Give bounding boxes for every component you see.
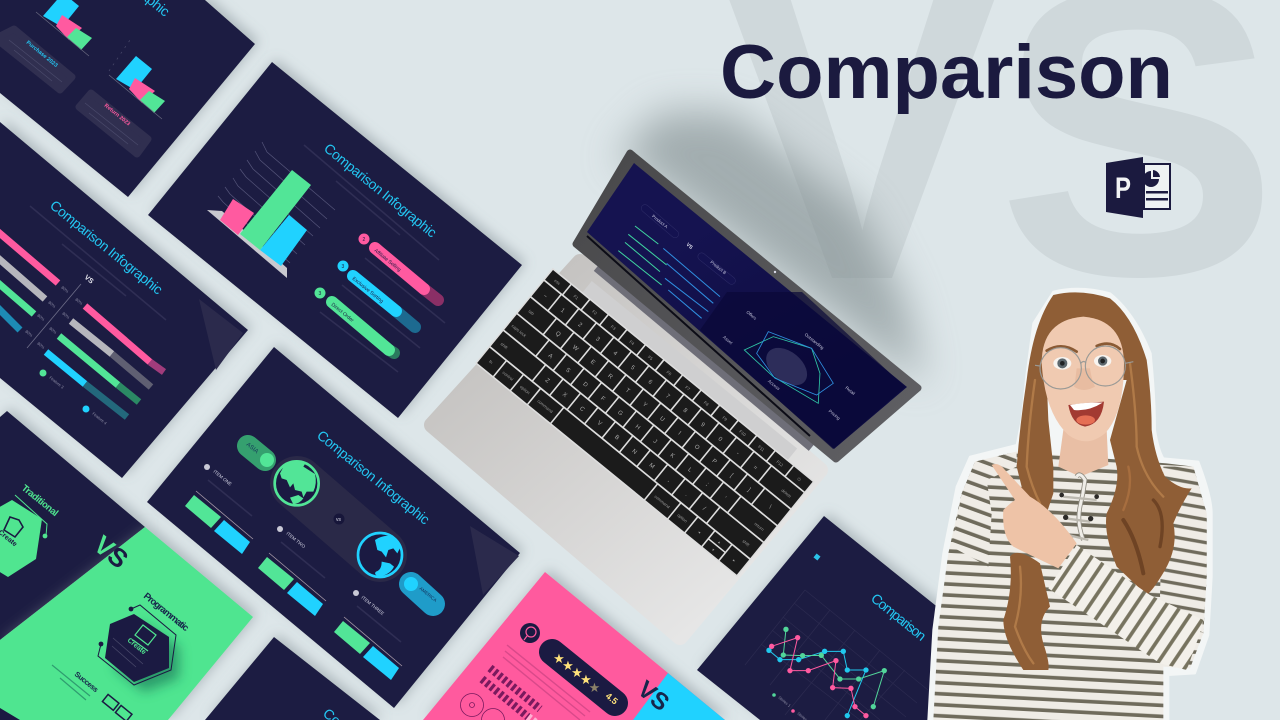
function row: F9 <box>721 415 729 422</box>
legend <box>772 693 812 720</box>
camera <box>774 271 776 273</box>
vs badge: vs <box>336 517 342 523</box>
function row: F8 <box>703 400 710 407</box>
hair highlights <box>1015 363 1163 663</box>
icon: magnifier badge <box>520 623 540 643</box>
legend: Feature 4 <box>91 411 108 426</box>
legend <box>40 370 108 426</box>
hinge <box>597 267 812 447</box>
percent labels: 80% <box>74 297 84 306</box>
rating pill: ★ <box>571 665 583 680</box>
center divider with VS: VS <box>83 274 95 286</box>
home row: H <box>634 424 641 431</box>
slide: bottom partial <box>205 637 389 720</box>
traditional hexagon <box>0 495 47 577</box>
slide title: Comparison Infographic <box>321 140 440 240</box>
percent labels: 80% <box>36 313 46 322</box>
function row: F5 <box>647 354 654 362</box>
chart: category 1 <box>36 0 92 56</box>
QWERTY row: tab <box>528 309 536 317</box>
bottom letter row: , <box>666 478 672 484</box>
item 1 pill <box>358 234 445 323</box>
QWERTY row: [ <box>729 473 734 479</box>
rating pill: ★ <box>589 680 600 695</box>
title: Comparison <box>720 30 1173 115</box>
slide: top-left bar charts <box>0 0 255 197</box>
space row: ◂ <box>697 529 702 535</box>
bottom letter row: shift <box>500 341 509 351</box>
slide title: Comparison Infographic <box>314 427 433 527</box>
circle icons <box>460 694 504 720</box>
function row: F2 <box>591 309 599 316</box>
function row: F3 <box>610 324 617 331</box>
rating pill <box>552 651 620 706</box>
number row: 6 <box>647 379 653 386</box>
radar labels: Retail <box>844 385 856 396</box>
eyebrows <box>1047 344 1120 352</box>
chart: category 2 <box>109 40 165 119</box>
card: return: Return 2023 <box>103 103 131 127</box>
item three: ITEM THREE <box>360 595 385 616</box>
space row: command <box>536 398 554 414</box>
center divider with VS <box>27 274 95 348</box>
bottom letter row: M <box>648 463 655 470</box>
heading: programmatic: Programmatic <box>141 591 191 634</box>
screen <box>587 163 907 449</box>
number row: 8 <box>682 408 689 415</box>
laptop lid <box>576 153 918 459</box>
icon: blue globe <box>358 533 402 577</box>
pointing hand <box>992 464 1077 568</box>
QWERTY row <box>518 298 790 525</box>
home row: G <box>616 410 624 418</box>
function row <box>545 270 813 491</box>
bottom letter row: V <box>596 420 603 427</box>
heading: success: Success <box>73 670 100 694</box>
card: purchase <box>0 29 72 90</box>
percent labels <box>24 285 84 350</box>
cyan accent square <box>813 553 821 561</box>
function row: F1 <box>573 294 580 301</box>
home row <box>504 314 776 541</box>
torso sweater <box>933 452 1207 720</box>
face <box>1042 317 1124 441</box>
bottom letter row: Z <box>544 378 550 385</box>
neckline lace <box>1059 475 1099 540</box>
space row: ▸ <box>732 558 737 563</box>
slide title: Comparison Infographic <box>47 197 166 297</box>
slide title: Comparison <box>868 590 929 644</box>
icon: green globe <box>275 461 319 505</box>
connector band <box>297 483 380 555</box>
icon: PowerPoint: P <box>1115 170 1131 205</box>
slide: rating pink and cyan <box>423 572 725 720</box>
radar labels: Offers <box>745 310 758 321</box>
america pill <box>404 577 439 604</box>
home row: L <box>686 467 693 474</box>
slide: traditional vs programmatic <box>0 411 253 720</box>
function row: F12 <box>775 459 785 468</box>
chart: grid <box>745 590 928 720</box>
number row: = <box>752 465 759 472</box>
rating pill: ★ <box>580 672 592 687</box>
home row: J <box>652 439 658 445</box>
item one <box>185 464 253 554</box>
screen content in zoom coordinates: VS <box>685 242 694 251</box>
function row: F4 <box>628 339 636 347</box>
number row: 2 <box>577 322 583 329</box>
success text lines <box>52 665 90 700</box>
QWERTY row: Y <box>641 402 648 409</box>
decorative triangle <box>199 299 243 370</box>
asia pill <box>245 442 274 467</box>
laptop base <box>432 262 820 637</box>
text lines <box>503 645 590 720</box>
number row: 4 <box>612 351 618 358</box>
space row: option <box>519 384 532 396</box>
percent labels: 80% <box>24 329 34 338</box>
comparison bars <box>618 226 720 318</box>
card: return <box>79 93 148 154</box>
item 3 pill <box>314 288 398 372</box>
QWERTY row: Q <box>554 331 562 338</box>
screen content in zoom coordinates: Product B <box>709 260 727 275</box>
home row: F <box>599 396 606 403</box>
radar chart <box>744 332 833 403</box>
number row: 0 <box>717 436 724 443</box>
screen content in zoom coordinates: Product A <box>651 214 669 229</box>
QWERTY row: W <box>571 345 579 353</box>
percent labels: 80% <box>47 300 57 309</box>
number row: 3 <box>594 336 601 343</box>
subtitle lines <box>30 206 166 320</box>
QWERTY row: T <box>624 388 631 395</box>
percent labels: 80% <box>36 341 46 350</box>
radar labels: Outstanding <box>804 332 825 351</box>
space row: control <box>502 370 514 382</box>
laptop <box>432 153 918 637</box>
eyes <box>1053 355 1111 370</box>
item 1 pill: Affiliate Selling <box>373 248 402 273</box>
QWERTY row: I <box>677 431 682 437</box>
item one: ITEM ONE <box>212 469 233 487</box>
slide: 3D bar chart <box>148 62 522 418</box>
bottom letter row: C <box>578 406 586 414</box>
home row: return <box>753 521 766 532</box>
QWERTY row: \ <box>767 505 773 510</box>
QWERTY row: P <box>710 458 717 465</box>
screen content in zoom coordinates <box>618 208 856 421</box>
home row: K <box>669 453 676 460</box>
percent labels: 80% <box>48 326 58 335</box>
radar labels: Pricing <box>828 409 842 421</box>
percent labels: 80% <box>61 311 71 320</box>
subtitle lines <box>304 145 439 260</box>
card: purchase: Purchase 2023 <box>25 40 58 69</box>
left bars <box>0 225 58 330</box>
rating dashes <box>482 668 540 720</box>
legend: Feature 3 <box>48 375 65 390</box>
radar labels: Access <box>767 379 781 391</box>
item two: ITEM TWO <box>285 531 307 549</box>
america pill: AMERICA <box>418 586 439 604</box>
QWERTY row: ] <box>746 487 751 493</box>
number row: 5 <box>629 365 636 372</box>
forearm <box>1048 545 1203 670</box>
space row: fn <box>488 359 494 365</box>
glasses <box>1035 346 1133 389</box>
item 1 pill: 2 <box>362 237 366 243</box>
product pills <box>645 208 732 281</box>
rating pill: 4.5 <box>604 691 620 706</box>
speaker grill <box>582 281 797 460</box>
bottom letter row <box>491 331 763 558</box>
slide: globes comparison <box>147 347 520 708</box>
decorative triangle <box>470 526 519 595</box>
chart: 3D bars <box>207 142 335 278</box>
vs badge <box>334 514 344 524</box>
item 3 pill: Direct Order <box>330 302 355 324</box>
heading: traditional: Traditional <box>19 483 60 519</box>
sticker outline <box>928 289 1212 720</box>
radar labels: Asset <box>722 335 734 346</box>
item 2 pill <box>338 260 420 348</box>
keyboard <box>475 257 824 577</box>
radar labels <box>722 310 856 421</box>
chart: multi-series lines <box>766 627 887 718</box>
home row: caps lock <box>511 323 528 339</box>
item three <box>334 590 402 680</box>
percent labels: 80% <box>60 285 70 294</box>
function row: F11 <box>757 444 766 453</box>
number row: 9 <box>699 422 706 429</box>
number row: delete <box>780 488 793 499</box>
number row: ~ <box>541 293 548 301</box>
item 3 pill: 3 <box>318 291 322 297</box>
function row: F6 <box>666 370 673 377</box>
item two <box>258 526 326 616</box>
home row: A <box>547 353 554 360</box>
icon: PowerPoint <box>1106 157 1170 218</box>
right bars <box>46 306 164 417</box>
neck <box>1058 430 1108 477</box>
hair back <box>1017 292 1192 595</box>
bottom letter row: / <box>701 506 707 512</box>
QWERTY row: E <box>589 359 596 366</box>
space row <box>477 348 749 575</box>
laptop cast shadow <box>610 112 925 385</box>
home row: S <box>564 367 571 374</box>
function row: F10 <box>738 429 748 438</box>
programmatic hexagon: Create <box>126 637 147 656</box>
number row: 7 <box>664 393 671 401</box>
asia pill: ASIA <box>245 442 259 455</box>
space row: command <box>653 494 671 510</box>
programmatic hexagon <box>98 605 176 685</box>
legend: Series 1 <box>777 695 793 708</box>
space row: ▾ <box>711 547 716 552</box>
bottom letter row: N <box>630 449 638 456</box>
function row: ⏻ <box>796 476 803 483</box>
icons: money <box>102 694 132 720</box>
item 2 pill: Exclusive Sorting <box>351 276 384 305</box>
rating pill: ★ <box>553 651 565 666</box>
bottom letter row: . <box>684 492 689 498</box>
hair lower left strand <box>1003 553 1050 670</box>
nose <box>1074 368 1095 390</box>
QWERTY row: O <box>693 444 701 452</box>
function row: F7 <box>684 385 692 392</box>
background VS watermark <box>725 0 1279 365</box>
function row: esc <box>553 278 562 286</box>
item 2 pill: 3 <box>342 264 344 270</box>
home row: ; <box>704 482 710 488</box>
mouth <box>1068 402 1104 427</box>
QWERTY row: R <box>606 373 614 381</box>
QWERTY row: U <box>658 416 665 423</box>
slide: line chart <box>697 516 960 720</box>
home row: ' <box>722 496 727 502</box>
number row: 1 <box>559 308 566 315</box>
bottom letter row: B <box>613 434 620 442</box>
space row: option <box>676 513 689 524</box>
home row: D <box>581 381 589 389</box>
VS mark: VS <box>88 529 134 574</box>
hexagon shadow <box>115 624 179 692</box>
person: pointing woman <box>928 289 1212 720</box>
bottom letter row: shift <box>741 539 751 548</box>
space row: ▴ <box>717 539 722 545</box>
left shoulder sleeve <box>952 452 1017 567</box>
number row: - <box>735 451 740 457</box>
rating pill: ★ <box>562 658 574 673</box>
VS mark: VS <box>632 676 674 717</box>
right sleeve <box>1160 467 1207 633</box>
slide: VS bars <box>0 122 248 478</box>
bottom letter row: X <box>561 392 568 399</box>
number row <box>531 281 804 508</box>
